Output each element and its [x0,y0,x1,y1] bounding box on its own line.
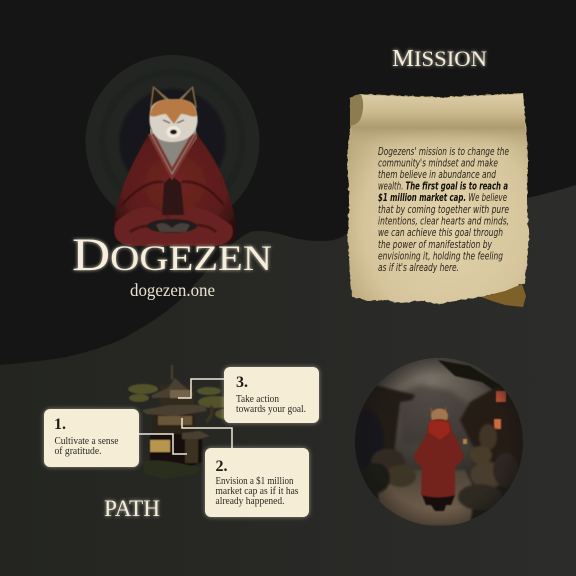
vignette [376,358,522,526]
mission text: $1 million market cap. We believe [378,192,507,204]
scroll panel [347,93,529,307]
card 3: Take action [236,394,280,405]
heading: mission: MISSION [392,46,487,72]
mission text: community's mindset and make [378,158,498,170]
right roof [438,360,500,390]
mission text: the power of manifestation by [378,239,493,251]
trees [128,384,235,424]
card 2: Envision a $1 million [216,476,294,487]
title: Dogezen: DOGEZEN [72,229,272,281]
card 1: 1. [54,416,66,433]
distant town [395,385,470,445]
scroll curl [350,95,363,128]
right building [460,385,523,470]
card 3: 3. [236,374,248,391]
card 2 [205,448,309,517]
misty sky [376,358,508,517]
card 3: towards your goal. [236,404,306,415]
mission text: as if it's already here. [378,262,459,274]
figure [413,406,464,511]
path [378,470,475,526]
left building [360,385,416,450]
website: dogezen.one: dogezen.one [130,280,215,300]
pagoda illustration [128,365,235,479]
mission text: Dogezens' mission is to change the [378,146,509,158]
mission text [378,146,509,274]
dog head [149,86,198,142]
mission text: envisioning it, holding the feeling [378,250,503,262]
dog chest [150,128,197,176]
mission text: we can achieve this goal through [378,227,503,239]
roofs [142,365,210,439]
heading: path: PATH [104,496,160,521]
robe [114,133,237,246]
card 1: of gratitude. [54,446,102,457]
card 1 [44,409,139,467]
mission text: intentions, clear hearts and minds, [378,216,509,228]
mission text: that by coming together with pure [378,204,509,216]
scroll burnt corner [481,284,526,307]
robe collar [149,134,197,178]
scroll paper [347,93,529,304]
building body [150,434,202,472]
card 2: 2. [216,458,228,475]
scroll top shading [350,94,527,152]
lanterns [463,391,506,444]
windows [150,440,170,452]
dog illustration [86,55,260,246]
mission text: them believe in abundance and [378,169,496,181]
circular illustration [351,358,523,526]
left bushes [351,410,416,493]
connector lines [138,379,232,454]
mission text: wealth. The first goal is to reach a [378,180,508,192]
background wave [0,185,576,576]
card 2: market cap as if it has [216,486,298,497]
card 1: Cultivate a sense [54,436,119,447]
base [141,460,202,479]
right bushes [458,424,519,510]
halo [86,55,260,229]
card 2: already happened. [216,496,284,507]
card 3 [224,367,319,423]
